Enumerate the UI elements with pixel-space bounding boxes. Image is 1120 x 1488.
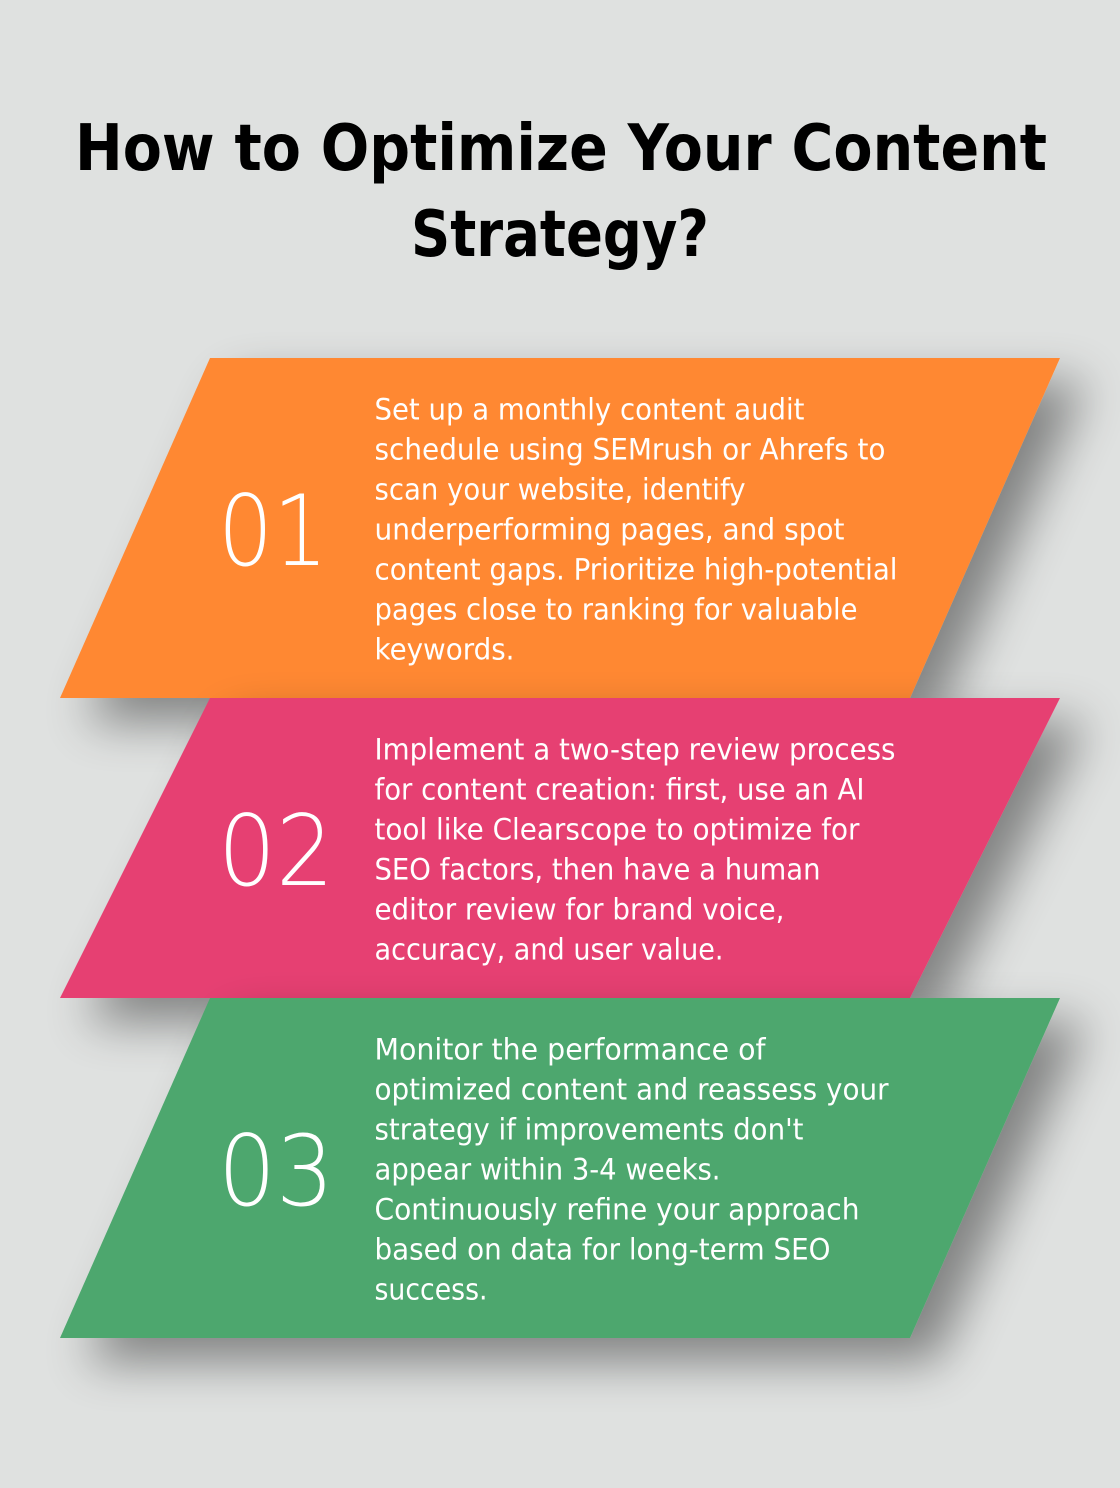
panel: step 03 green: [60, 998, 1060, 1338]
step 02 text: Implement a two-step review process: [374, 732, 896, 766]
step 03 text: strategy if improvements don't: [374, 1112, 804, 1146]
step 03 text: based on data for long-term SEO: [374, 1232, 830, 1266]
step 03 text: appear within 3-4 weeks.: [374, 1152, 720, 1186]
step 03 text: [374, 1032, 889, 1306]
title: [75, 112, 1047, 272]
number 03: 03: [218, 1115, 334, 1229]
orange parallelogram: [60, 358, 1060, 698]
step 01 text: keywords.: [374, 632, 514, 666]
step 03 text: success.: [374, 1272, 488, 1306]
step 02 text: SEO factors, then have a human: [374, 852, 820, 886]
step 02 text: editor review for brand voice,: [374, 892, 784, 926]
step 01 text: [374, 392, 898, 666]
step 01 text: schedule using SEMrush or Ahrefs to: [374, 432, 886, 466]
step 03 text: Continuously refine your approach: [374, 1192, 860, 1226]
step 02 text: for content creation: first, use an AI: [374, 772, 864, 806]
step 01 text: scan your website, identify: [374, 472, 746, 506]
step 01 text: pages close to ranking for valuable: [374, 592, 858, 626]
panel: step 01 orange: [60, 358, 1060, 698]
step 02 text: [374, 732, 896, 966]
number 02: 02: [218, 795, 334, 909]
pink parallelogram: [60, 698, 1060, 998]
green parallelogram: [60, 998, 1060, 1338]
number 01: 01: [218, 475, 328, 589]
step 01 text: underperforming pages, and spot: [374, 512, 844, 546]
step 03 text: optimized content and reassess your: [374, 1072, 889, 1106]
step 02 text: tool like Clearscope to optimize for: [374, 812, 860, 846]
title: Strategy?: [411, 198, 709, 272]
step 03 text: Monitor the performance of: [374, 1032, 766, 1066]
step 01 text: content gaps. Prioritize high-potential: [374, 552, 898, 586]
panel: step 02 pink: [60, 698, 1060, 998]
step 01 text: Set up a monthly content audit: [374, 392, 804, 426]
step 02 text: accuracy, and user value.: [374, 932, 724, 966]
